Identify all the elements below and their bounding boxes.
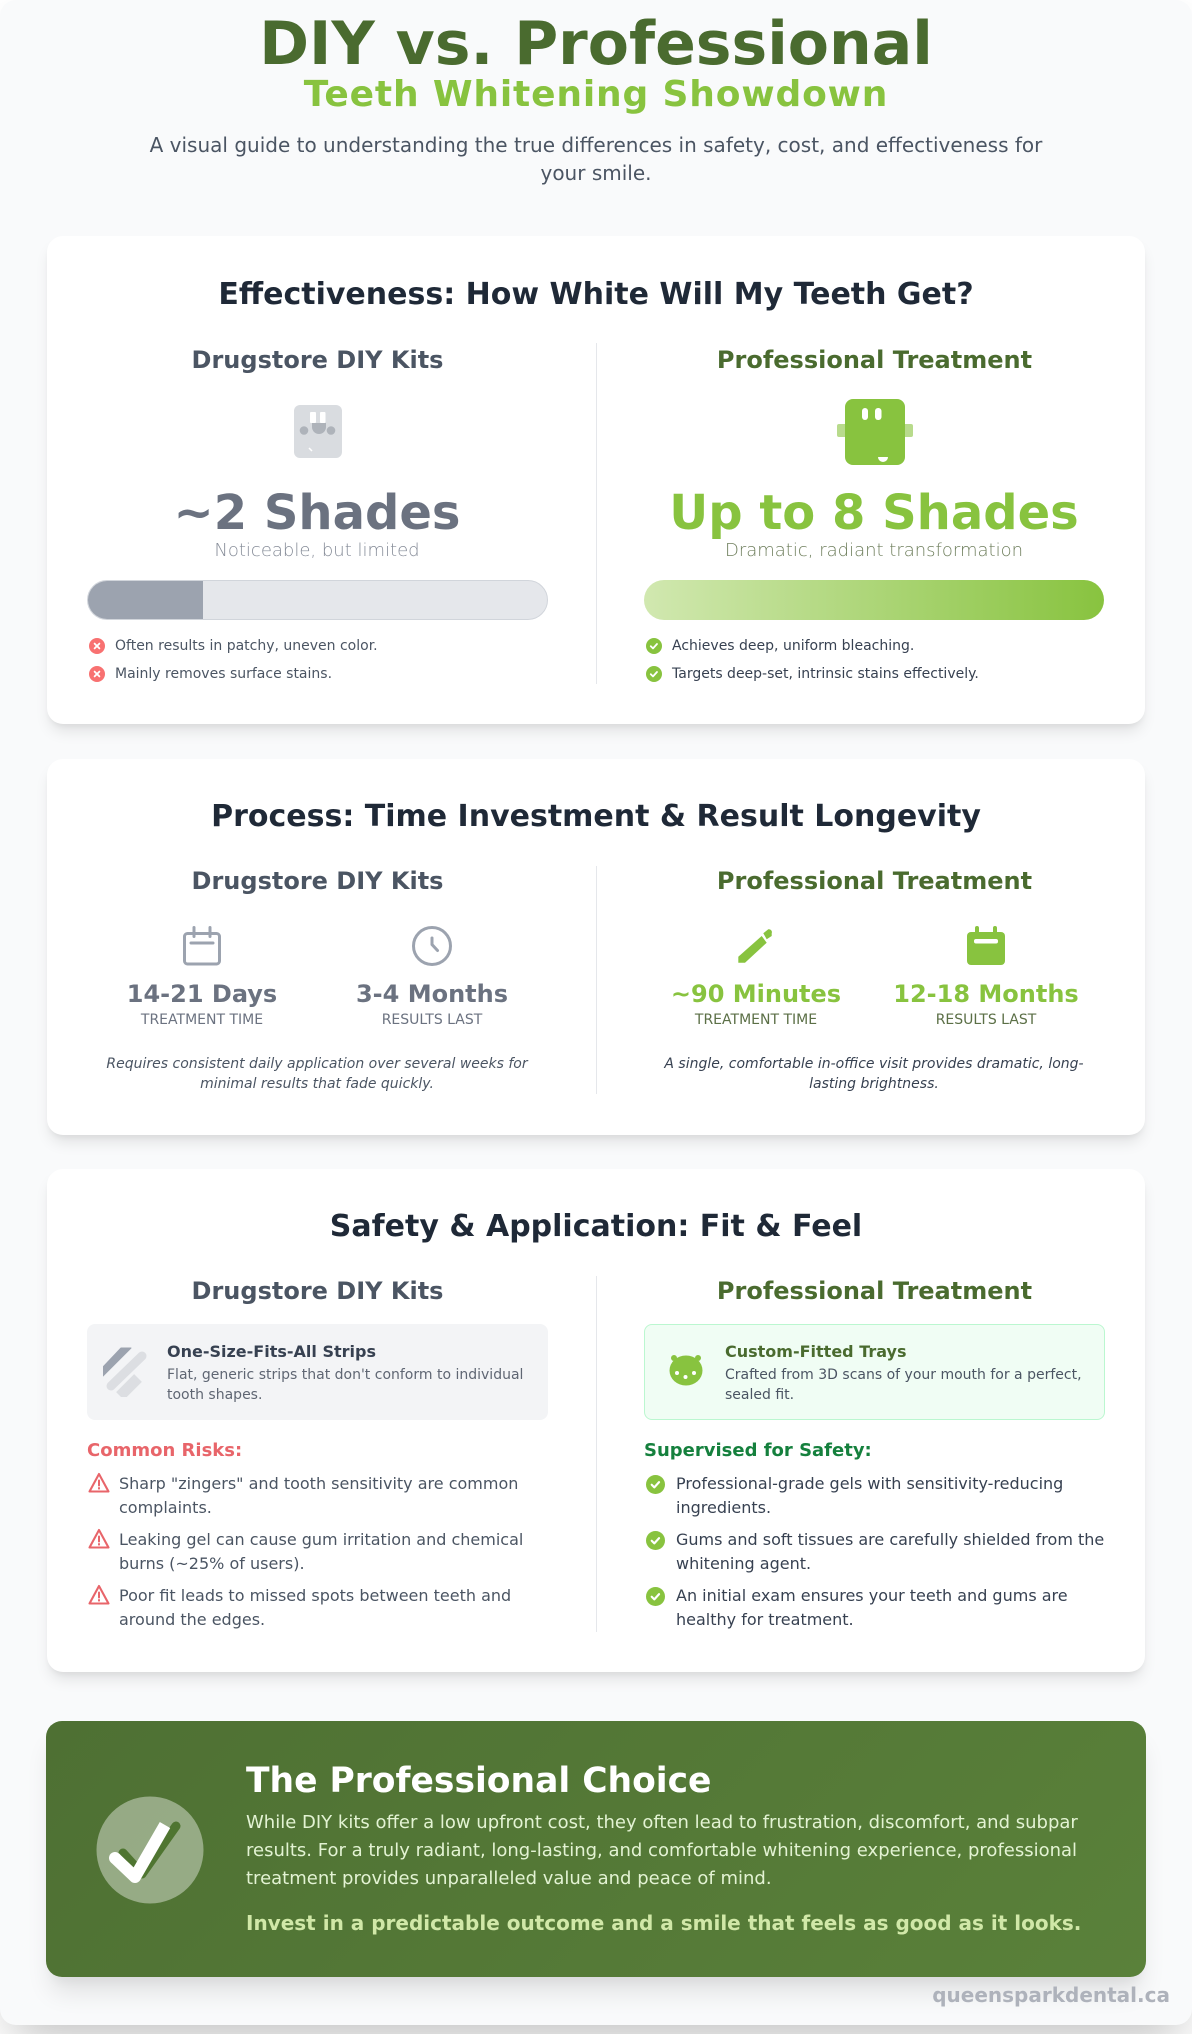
safety item <box>646 1474 1063 1517</box>
list item: Achieves deep, uniform bleaching. <box>672 638 914 654</box>
progress bar: 25% <box>87 580 548 620</box>
column: DIY safety <box>87 1277 548 1629</box>
column: DIY effectiveness <box>87 346 548 682</box>
progress bar: 100% <box>644 580 1104 620</box>
feature description: sealed fit. <box>725 1387 794 1403</box>
heading: professional: Professional Treatment <box>717 1277 1032 1305</box>
icon: check <box>646 1587 665 1606</box>
subtitle: Teeth Whitening Showdown <box>304 74 888 115</box>
panel: safety <box>47 1169 1145 1672</box>
stat: results last: 3-4 Months <box>356 980 508 1008</box>
conclusion heading: The Professional Choice <box>246 1761 711 1801</box>
icon: check <box>646 1475 665 1494</box>
feature description <box>167 1367 523 1403</box>
heading: DIY: Drugstore DIY Kits <box>192 1277 443 1305</box>
icon: check <box>646 1531 665 1550</box>
list heading: risks: Common Risks: <box>87 1440 242 1461</box>
caption: Dramatic, radiant transformation <box>725 540 1023 561</box>
heading: professional: Professional Treatment <box>717 346 1032 374</box>
feature description: Flat, generic strips that don't conform to individual <box>167 1367 523 1383</box>
heading: process: Process: Time Investment & Result Longevity <box>211 799 981 834</box>
feature box: trays <box>644 1324 1105 1420</box>
intro text: your smile. <box>540 161 652 185</box>
conclusion text: While DIY kits offer a low upfront cost, they often lead to frustration, discomfort, and subpar <box>246 1812 1078 1833</box>
icon: clock <box>412 926 452 966</box>
column: professional effectiveness <box>644 346 1104 682</box>
feature box: strips <box>87 1324 548 1420</box>
heading: DIY: Drugstore DIY Kits <box>192 346 443 374</box>
conclusion text <box>246 1809 1078 1893</box>
icon: cross <box>89 638 105 654</box>
stat: 8 shades: Up to 8 Shades <box>669 485 1079 541</box>
icon: strips <box>103 1348 146 1397</box>
intro text: A visual guide to understanding the true differences in safety, cost, and effectiveness for <box>150 133 1042 157</box>
label: TREATMENT TIME <box>695 1012 817 1028</box>
safety item: Gums and soft tissues are carefully shielded from the <box>676 1530 1104 1549</box>
safety item <box>646 1586 1068 1629</box>
icon: check badge <box>96 1796 204 1904</box>
heading: effectiveness: Effectiveness: How White Will My Teeth Get? <box>218 277 974 312</box>
note: lasting brightness. <box>809 1076 939 1092</box>
risk item: complaints. <box>119 1498 212 1517</box>
note <box>106 1056 528 1092</box>
icon: warning <box>88 1472 110 1492</box>
column: professional process <box>664 867 1084 1092</box>
icon: calendar outline <box>183 926 221 966</box>
risk item <box>88 1584 511 1629</box>
label: RESULTS LAST <box>936 1012 1036 1028</box>
icon: pencil <box>738 929 772 963</box>
icon: tray <box>670 1355 702 1386</box>
note: Requires consistent daily application over several weeks for <box>106 1056 528 1072</box>
conclusion text: treatment provides unparalleled value and peace of mind. <box>246 1868 772 1889</box>
caption: Noticeable, but limited <box>214 540 420 561</box>
icon: warning <box>88 1584 110 1604</box>
feature title: One-Size-Fits-All Strips <box>167 1342 376 1361</box>
column: professional safety <box>644 1277 1105 1629</box>
feature description: tooth shapes. <box>167 1387 262 1403</box>
header <box>150 9 1042 185</box>
label: RESULTS LAST <box>382 1012 482 1028</box>
stat: treatment time: ~90 Minutes <box>671 980 841 1008</box>
note: A single, comfortable in-office visit provides dramatic, long- <box>664 1056 1084 1072</box>
panel: process <box>47 759 1145 1135</box>
icon: grey tooth <box>294 405 342 458</box>
heading: DIY: Drugstore DIY Kits <box>192 867 443 895</box>
safety item: healthy for treatment. <box>676 1610 854 1629</box>
conclusion callout: Invest in a predictable outcome and a smile that feels as good as it looks. <box>246 1911 1081 1935</box>
safety item <box>646 1530 1104 1573</box>
feature description: Crafted from 3D scans of your mouth for a perfect, <box>725 1367 1082 1383</box>
stat: results last: 12-18 Months <box>893 980 1079 1008</box>
label: TREATMENT TIME <box>141 1012 263 1028</box>
icon: calendar solid <box>967 926 1005 965</box>
risk item: Poor fit leads to missed spots between teeth and <box>119 1586 511 1605</box>
icon: warning <box>88 1528 110 1548</box>
list item: Mainly removes surface stains. <box>115 666 332 682</box>
note: minimal results that fade quickly. <box>200 1076 434 1092</box>
title: DIY vs. Professional <box>259 9 933 79</box>
icon: check <box>646 666 662 682</box>
icon: cross <box>89 666 105 682</box>
list heading: safety: Supervised for Safety: <box>644 1440 872 1461</box>
heading: professional: Professional Treatment <box>717 867 1032 895</box>
feature title: Custom-Fitted Trays <box>725 1342 906 1361</box>
safety item: whitening agent. <box>676 1554 811 1573</box>
column: DIY process <box>106 867 528 1092</box>
list item: Often results in patchy, uneven color. <box>115 638 378 654</box>
risk item <box>88 1472 518 1517</box>
intro text <box>150 133 1042 185</box>
icon: check <box>646 638 662 654</box>
risk item: burns (~25% of users). <box>119 1554 305 1573</box>
safety item: ingredients. <box>676 1498 771 1517</box>
risk item: around the edges. <box>119 1610 265 1629</box>
stat: treatment time: 14-21 Days <box>127 980 277 1008</box>
watermark: queensparkdental.ca <box>932 1983 1170 2007</box>
safety item: Professional-grade gels with sensitivity-reducing <box>676 1474 1063 1493</box>
risk item: Leaking gel can cause gum irritation and chemical <box>119 1530 523 1549</box>
feature description <box>725 1367 1082 1403</box>
icon: green tooth <box>837 399 913 465</box>
heading: safety: Safety & Application: Fit & Feel <box>330 1209 862 1244</box>
risk item <box>88 1528 523 1573</box>
conclusion text: results. For a truly radiant, long-lasting, and comfortable whitening experience, professional <box>246 1840 1077 1861</box>
risk item: Sharp "zingers" and tooth sensitivity are common <box>119 1474 518 1493</box>
list item: Targets deep-set, intrinsic stains effectively. <box>672 666 979 682</box>
safety item: An initial exam ensures your teeth and gums are <box>676 1586 1068 1605</box>
note <box>664 1056 1084 1092</box>
stat: 2 shades: ~2 Shades <box>174 485 460 541</box>
panel: conclusion <box>46 1721 1146 1977</box>
panel: effectiveness <box>47 236 1145 724</box>
